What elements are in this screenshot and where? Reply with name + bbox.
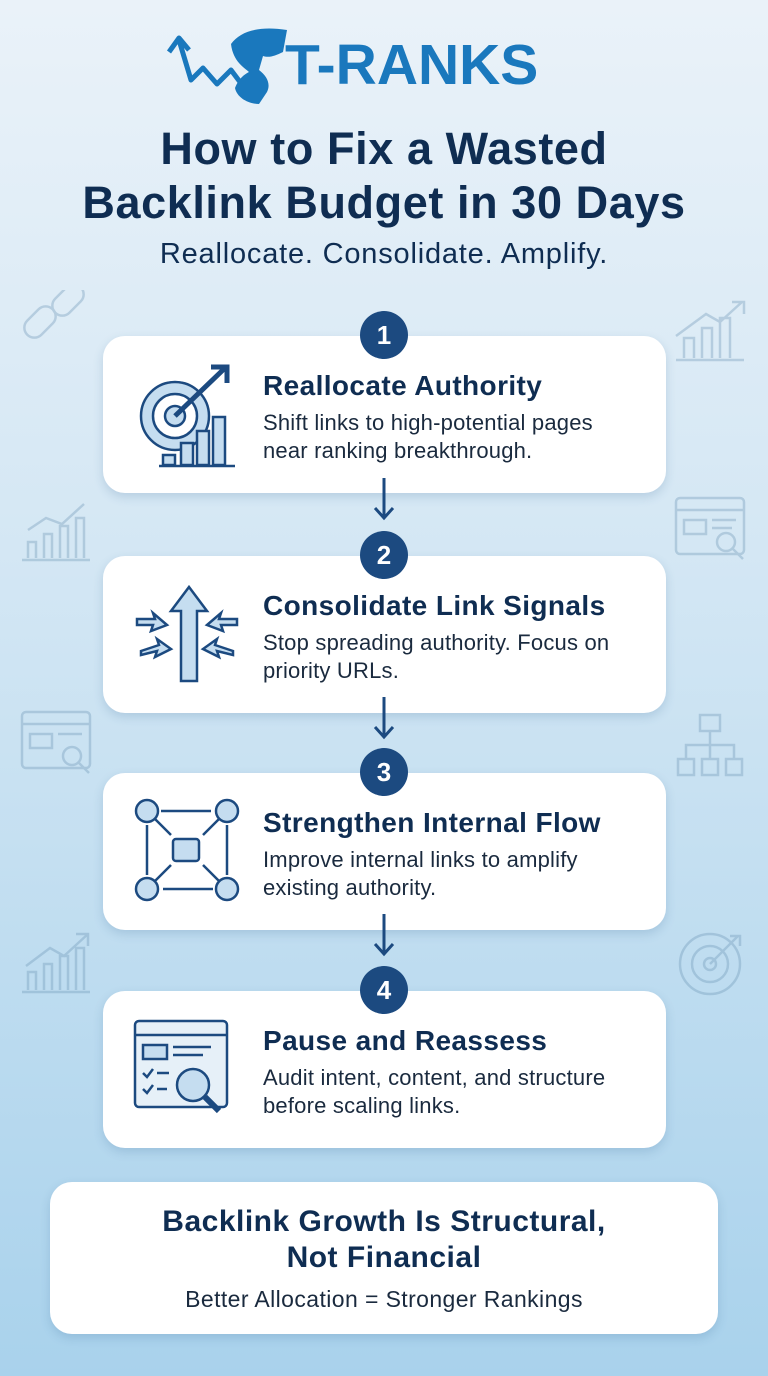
logo: T-RANKS bbox=[285, 33, 538, 97]
card 1: Reallocate Authority: Reallocate Authority bbox=[263, 370, 542, 401]
card 1: Reallocate Authority: Shift links to high-potential pages near ranking breakthrough. bbox=[263, 410, 593, 463]
logo bbox=[167, 28, 538, 104]
badge 2: 2 bbox=[377, 540, 391, 570]
icon: network flow bbox=[134, 798, 240, 902]
decorative background icons bbox=[20, 290, 746, 996]
subtitle: Reallocate. Consolidate. Amplify. bbox=[160, 238, 608, 270]
card 4: Pause and Reassess: Pause and Reassess bbox=[263, 1025, 547, 1056]
card 4: Pause and Reassess bbox=[103, 991, 666, 1148]
card 4: Pause and Reassess: Audit intent, content, and structure before scaling links. bbox=[263, 1065, 605, 1118]
badge 3: 3 bbox=[377, 757, 391, 787]
icon: browser with magnifier bbox=[134, 1020, 228, 1114]
arrow 2 bbox=[374, 697, 394, 740]
icon: target with growth chart bbox=[140, 364, 235, 468]
card 3: Strengthen Internal Flow: Strengthen Internal Flow bbox=[263, 807, 601, 838]
arrow 1 bbox=[374, 478, 394, 520]
arrow 3 bbox=[374, 914, 394, 956]
title: How to Fix a Wasted bbox=[160, 123, 608, 174]
card 3: Strengthen Internal Flow bbox=[103, 773, 666, 930]
icon: converging arrows bbox=[136, 585, 238, 682]
card 3: Strengthen Internal Flow: Improve internal links to amplify existing authority. bbox=[263, 847, 578, 900]
card 2: Consolidate Link Signals bbox=[103, 556, 666, 713]
card 2: Consolidate Link Signals: Stop spreading authority. Focus on priority URLs. bbox=[263, 630, 609, 683]
title bbox=[82, 123, 686, 228]
callout subtext: Better Allocation = Stronger Rankings bbox=[185, 1286, 583, 1312]
badge 1 bbox=[360, 311, 408, 359]
badge 3 bbox=[360, 748, 408, 796]
callout heading bbox=[162, 1205, 606, 1274]
title: Backlink Budget in 30 Days bbox=[82, 177, 686, 228]
final callout bbox=[50, 1182, 718, 1334]
callout heading: Backlink Growth Is Structural, bbox=[162, 1205, 606, 1238]
badge 1: 1 bbox=[377, 320, 391, 350]
badge 4: 4 bbox=[377, 975, 391, 1005]
badge 2 bbox=[360, 531, 408, 579]
card 1: Reallocate Authority bbox=[103, 336, 666, 493]
card 2: Consolidate Link Signals: Consolidate Link Signals bbox=[263, 590, 606, 621]
badge 4 bbox=[360, 966, 408, 1014]
callout heading: Not Financial bbox=[287, 1241, 481, 1274]
